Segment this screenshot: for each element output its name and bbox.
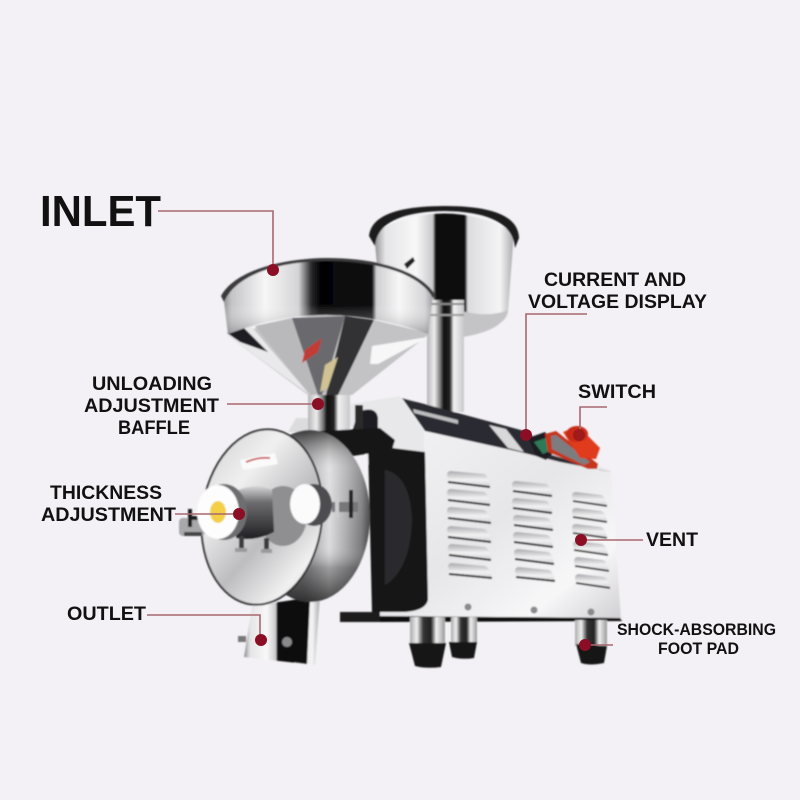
callout: outlet [67,604,267,646]
callout: unloading adjustment baffle: ADJUSTMENT [84,396,219,417]
adjustment assembly [179,484,358,553]
front disc [192,422,332,612]
discharge neck [288,392,363,436]
side knob [290,484,332,526]
label plates on control strip [489,425,524,452]
current and voltage display [528,432,558,460]
callout: switch: SWITCH [578,382,656,403]
boss [259,486,307,546]
top frame of grinder [300,428,395,458]
scale marker [240,453,278,470]
callout: shock-absorbing foot pad: FOOT PAD [658,639,739,658]
switch [545,426,600,469]
vent column 1 [447,471,492,579]
vent column 3 [572,492,610,588]
callout: current and voltage display [520,270,707,441]
right handle [332,490,358,518]
feet [409,617,607,668]
hopper cone [227,312,428,395]
callout: shock-absorbing foot pad [579,620,776,658]
rear hopper [369,206,519,337]
cabinet screws [464,604,594,616]
callout: current and voltage display: CURRENT AND [544,270,686,291]
shaft [236,486,274,539]
callout: thickness adjustment: ADJUSTMENT [41,505,176,526]
callout: inlet: INLET [40,187,161,236]
bolts [235,536,272,553]
middle foot [449,617,477,659]
cabinet front shoulder [350,396,424,470]
base edge [380,616,622,622]
callout: thickness adjustment: THICKNESS [50,483,162,504]
callout: unloading adjustment baffle: BAFFLE [118,418,190,439]
grinder machine photo [179,206,622,668]
callout: unloading adjustment baffle [84,374,324,439]
shoulder window [352,410,378,432]
callout: inlet [40,187,279,276]
support column [427,300,464,412]
black side section [368,445,428,612]
grinder drum [250,430,370,602]
callout: unloading adjustment baffle: UNLOADING [92,374,212,395]
left handle [179,509,205,536]
printed controls [413,409,458,424]
rear foot [575,620,607,664]
callout: shock-absorbing foot pad: SHOCK-ABSORBING [617,620,776,639]
adjustment dial [197,484,247,540]
front hopper [221,258,436,395]
callout: outlet: OUTLET [67,604,146,625]
control strip [402,398,612,472]
callout: switch [573,382,656,441]
front foot [409,617,446,668]
callout: vent: VENT [646,530,698,551]
machine cabinet [340,396,622,622]
hopper rim [221,258,436,302]
callout: thickness adjustment [41,483,245,526]
outlet pipe [238,596,320,665]
vent column 2 [512,481,555,582]
callout: current and voltage display: VOLTAGE DISPLAY [528,292,707,313]
hopper bowl [223,260,433,334]
callout: vent [575,530,698,551]
